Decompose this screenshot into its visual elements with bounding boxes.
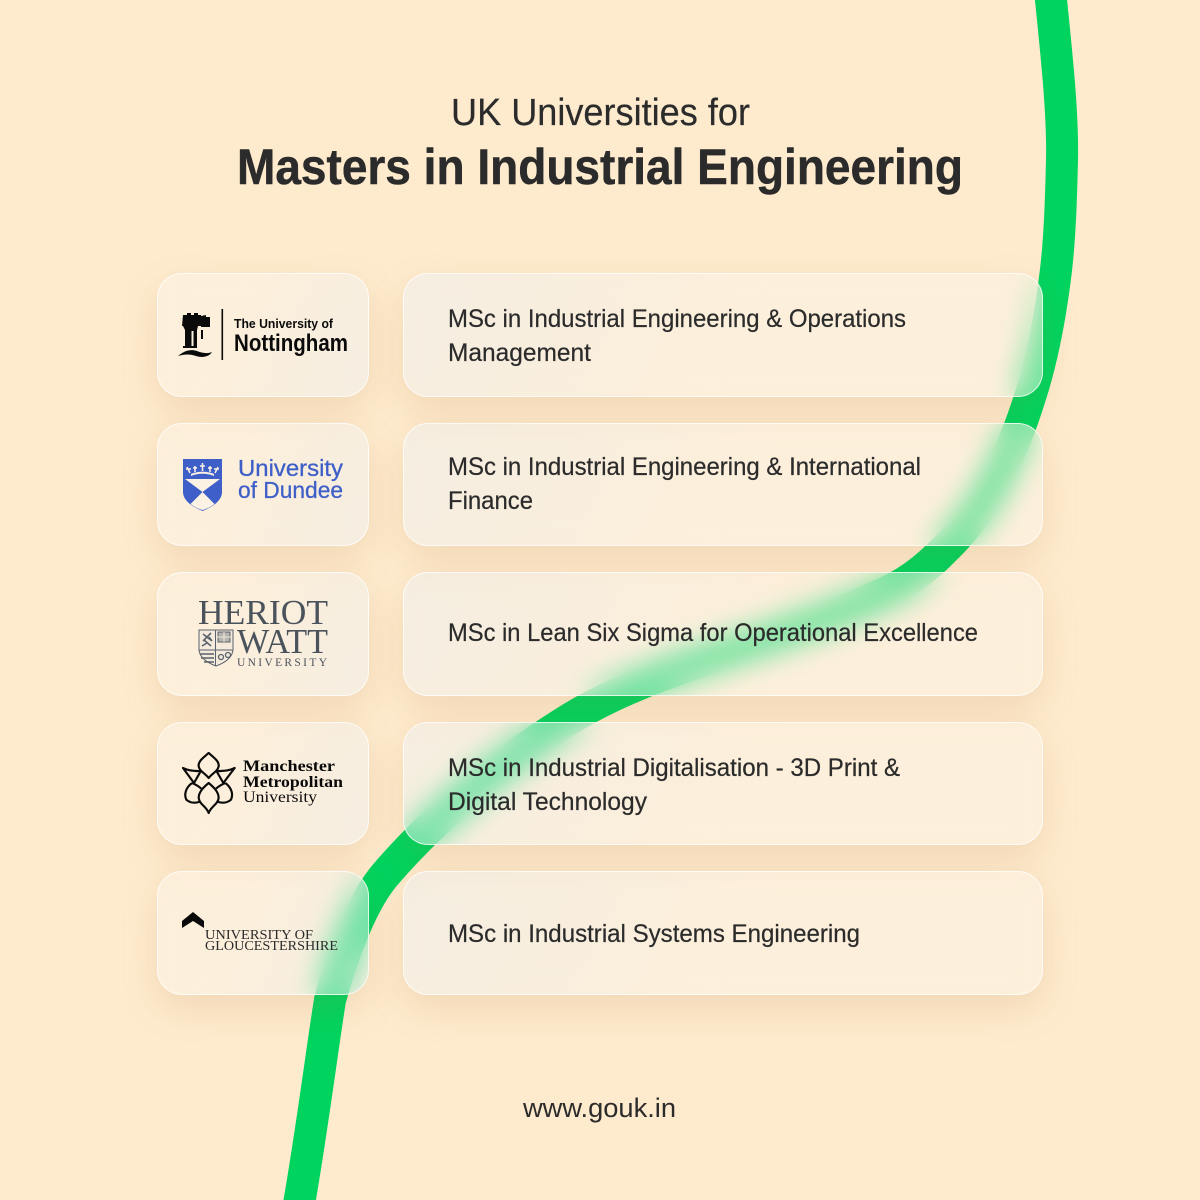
- logo text: Heriot-Watt: HERIOT: [198, 593, 328, 632]
- course card: Operations Management: Management: [448, 339, 591, 367]
- logo text: Heriot-Watt: WATT: [237, 622, 328, 661]
- logo card: University of Gloucestershire: [157, 871, 369, 995]
- logo text: Dundee: University: [238, 455, 344, 481]
- title: Masters in Industrial Engineering: [237, 139, 963, 195]
- logo text: Heriot-Watt: UNIVERSITY: [237, 657, 328, 669]
- course card: International Finance: [403, 423, 1043, 546]
- icon: Dundee shield: [183, 459, 222, 511]
- footer website: www.gouk.in: [522, 1093, 676, 1123]
- logo card: University of Nottingham: [157, 273, 369, 397]
- icon: Nottingham castle: [178, 313, 212, 357]
- course card: Industrial Systems Engineering: MSc in Industrial Systems Engineering: [448, 920, 860, 948]
- course card: Lean Six Sigma: MSc in Lean Six Sigma for Operational Excellence: [448, 619, 978, 647]
- course card: Industrial Digitalisation: [403, 722, 1043, 845]
- course card: Operations Management: [403, 273, 1043, 397]
- icon: Manchester rose: [183, 753, 235, 813]
- logo text: Manchester Metropolitan: Manchester: [243, 758, 335, 775]
- logo text: Manchester Metropolitan: University: [243, 789, 317, 806]
- logo card: Heriot-Watt University: [157, 572, 369, 696]
- course card: Industrial Digitalisation: MSc in Industrial Digitalisation - 3D Print &: [448, 754, 900, 782]
- course card: International Finance: MSc in Industrial Engineering & International: [448, 453, 921, 481]
- logo text: Heriot-Watt: [198, 593, 328, 669]
- course card: International Finance: Finance: [448, 487, 533, 515]
- course card: Industrial Systems Engineering: [403, 871, 1043, 995]
- logo text: Gloucestershire: [205, 927, 338, 953]
- course card: Lean Six Sigma: [403, 572, 1043, 696]
- logo text: Manchester Metropolitan: [243, 758, 343, 806]
- logo text: Dundee: [238, 455, 344, 503]
- logo card: University of Dundee: [157, 423, 369, 546]
- logo card: Manchester Metropolitan University: [157, 722, 369, 845]
- logo text: Dundee: of Dundee: [238, 477, 343, 503]
- title: UK Universities for: [451, 92, 750, 134]
- logo text: Nottingham: The University of: [234, 316, 334, 331]
- logo text: Gloucestershire: GLOUCESTERSHIRE: [205, 938, 338, 953]
- logo text: Nottingham: Nottingham: [234, 330, 348, 357]
- course card: Industrial Digitalisation: Digital Technology: [448, 788, 647, 816]
- logo text: Nottingham: [234, 316, 348, 357]
- course card: Operations Management: MSc in Industrial Engineering & Operations: [448, 305, 906, 333]
- logo text: Gloucestershire: UNIVERSITY OF: [205, 927, 314, 942]
- title: [0, 0, 1200, 220]
- logo text: Manchester Metropolitan: Metropolitan: [243, 774, 343, 791]
- icon: Gloucestershire chevron: [182, 912, 204, 928]
- icon: Heriot-Watt crest: [199, 630, 233, 666]
